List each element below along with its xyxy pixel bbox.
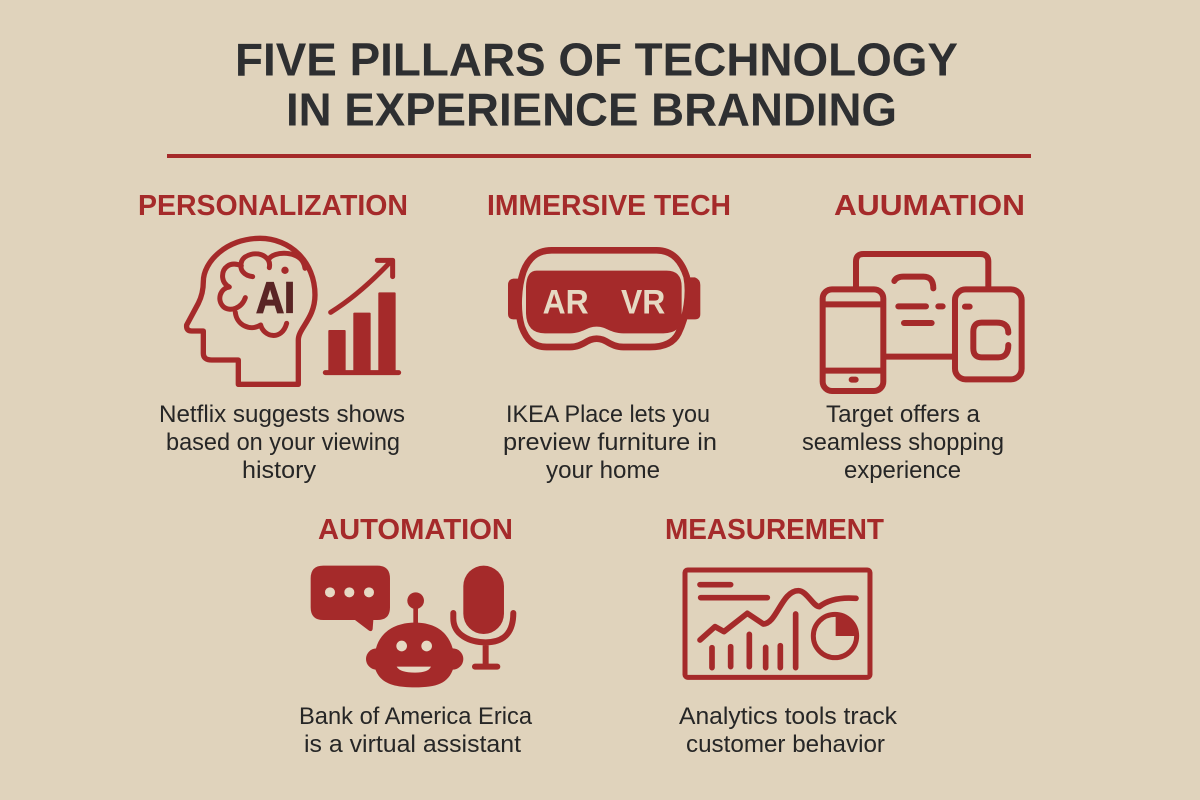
text: measurement example: Analytics tools track bbox=[679, 703, 898, 730]
panel: automation bbox=[299, 514, 533, 758]
text: immersive tech example: preview furniture in bbox=[503, 429, 717, 456]
text: measurement example: customer behavior bbox=[686, 731, 885, 758]
icon: AR VR headset: AR bbox=[543, 283, 589, 321]
heading: automation: AUTOMATION bbox=[318, 514, 513, 546]
heading: measurement: MEASUREMENT bbox=[665, 514, 884, 546]
panel: personalization bbox=[138, 190, 408, 484]
icon: analytics dashboard bbox=[685, 570, 870, 677]
panel: measurement bbox=[665, 514, 898, 758]
text: measurement example bbox=[679, 703, 898, 758]
heading: personalization: PERSONALIZATION bbox=[138, 190, 408, 222]
title bbox=[235, 34, 958, 136]
text: automation example: Bank of America Erica bbox=[299, 703, 533, 730]
text: seamless shopping example bbox=[802, 401, 1004, 484]
text: personalization example: based on your viewing bbox=[166, 429, 400, 456]
panel: immersive tech bbox=[487, 190, 731, 484]
heading: immersive tech: IMMERSIVE TECH bbox=[487, 190, 731, 222]
title: IN EXPERIENCE BRANDING bbox=[286, 84, 897, 136]
icon: AI head with growth chart: AI bbox=[256, 273, 295, 322]
text: seamless shopping example: Target offers a bbox=[826, 401, 981, 428]
text: seamless shopping example: seamless shopping bbox=[802, 429, 1004, 456]
icon: AI head with growth chart bbox=[187, 238, 399, 384]
icon: connected devices bbox=[823, 254, 1022, 391]
panel: omnichannel bbox=[802, 190, 1025, 484]
text: immersive tech example bbox=[503, 401, 717, 484]
text: automation example bbox=[299, 703, 533, 758]
icon: AR VR headset: VR bbox=[621, 283, 665, 321]
text: personalization example: Netflix suggests shows bbox=[159, 401, 405, 428]
icon: chat bubble, robot and microphone bbox=[311, 566, 513, 687]
text: automation example: is a virtual assistant bbox=[304, 731, 521, 758]
text: immersive tech example: IKEA Place lets you bbox=[506, 401, 710, 428]
icon: AR VR headset bbox=[508, 250, 700, 347]
text: personalization example bbox=[159, 401, 405, 484]
text: seamless shopping example: experience bbox=[844, 457, 961, 484]
heading: garbled automation: AUUMATION bbox=[834, 190, 1025, 222]
text: immersive tech example: your home bbox=[546, 457, 660, 484]
text: personalization example: history bbox=[242, 457, 316, 484]
title: FIVE PILLARS OF TECHNOLOGY bbox=[235, 34, 958, 86]
